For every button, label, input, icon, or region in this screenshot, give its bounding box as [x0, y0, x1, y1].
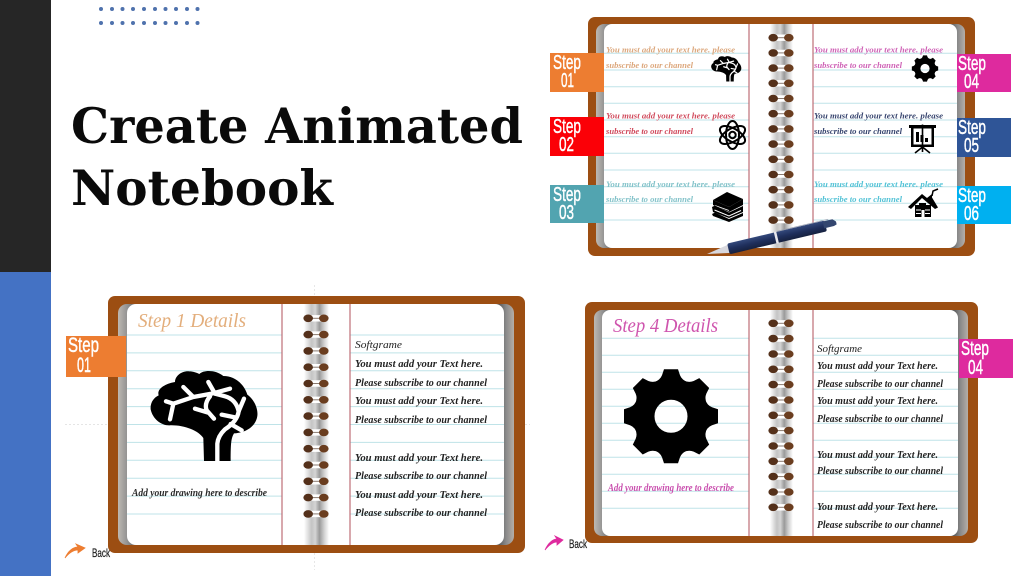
page edge	[596, 24, 965, 248]
notebook cover	[588, 17, 975, 256]
step tag 03	[550, 184, 604, 224]
text block: step 2	[605, 110, 735, 136]
step tag 01: 01	[561, 70, 574, 92]
notebook cover	[585, 302, 978, 543]
title	[71, 97, 523, 217]
title: Create Animated	[71, 97, 523, 155]
text block: notes: Please subscribe to our channel	[817, 414, 943, 425]
back link: Back	[569, 537, 588, 551]
step tag 05: Step	[958, 117, 986, 139]
blue sidebar band	[0, 272, 51, 576]
text block: step 1	[605, 44, 735, 70]
text block: step 5	[813, 110, 943, 136]
text block: notes: You must add your Text here.	[355, 359, 483, 370]
step tag 03: Step	[553, 184, 581, 206]
text block: notes: You must add your Text here.	[817, 502, 938, 513]
spiral spine shading	[770, 310, 793, 536]
text block: notes: You must add your Text here.	[355, 396, 483, 407]
dot pattern	[99, 7, 200, 25]
step tag 04	[957, 53, 1011, 93]
panel: overview notebook with six steps	[550, 17, 1011, 260]
text block: notes: Softgrame	[817, 344, 863, 355]
step tag 04: 04	[964, 71, 979, 93]
spiral rings	[303, 314, 329, 518]
icon: stack of books	[712, 192, 743, 222]
icon: brain	[711, 56, 741, 82]
text block: step 5: You must add your text here. please	[814, 110, 943, 120]
text block: notes	[355, 340, 487, 519]
step tag 02: Step	[553, 116, 581, 138]
text block: step 3	[605, 179, 735, 204]
text block: step 6: You must add your text here. please	[814, 179, 943, 189]
caption: drawing prompt: Add your drawing here to describe	[607, 483, 734, 494]
spiral rings	[768, 34, 794, 224]
step tag 01: Step	[68, 334, 99, 357]
step tag 01	[66, 334, 126, 377]
dark sidebar band	[0, 0, 51, 272]
notebook cover	[108, 296, 525, 553]
icon: brain large	[151, 371, 257, 462]
step tag 01: Step	[553, 52, 581, 74]
text block: notes: Please subscribe to our channel	[355, 415, 487, 426]
text block: notes: You must add your Text here.	[817, 361, 938, 372]
heading: step 4 details: Step 4 Details	[613, 315, 718, 337]
icon: house	[908, 189, 938, 217]
text block: notes: Please subscribe to our channel	[355, 471, 487, 482]
back link: Back	[92, 546, 111, 560]
icon: atom	[717, 121, 748, 149]
heading: step 1 details: Step 1 Details	[138, 310, 246, 332]
back link	[545, 536, 588, 551]
icon: pen	[706, 218, 838, 260]
page edge	[594, 310, 968, 536]
step tag 02	[550, 116, 604, 156]
text block: notes: Please subscribe to our channel	[355, 378, 487, 389]
text block: step 1: subscribe to our channel	[605, 60, 694, 70]
step tag 05: 05	[964, 135, 979, 157]
step tag 06	[957, 185, 1011, 225]
text block: step 2: subscribe to our channel	[605, 126, 694, 136]
notebook pages	[127, 304, 504, 545]
spiral spine shading	[770, 24, 793, 248]
panel: step 4 details notebook	[545, 302, 1013, 551]
spiral rings	[768, 320, 794, 511]
text block: step 4	[813, 44, 943, 70]
step tag 01	[550, 52, 604, 92]
icon: gear	[912, 55, 938, 82]
panel: step 1 details notebook	[65, 296, 525, 560]
text block: notes: Softgrame	[355, 340, 402, 351]
text block: notes: You must add your Text here.	[355, 453, 483, 464]
text block: notes: You must add your Text here.	[817, 396, 938, 407]
notebook pages	[604, 24, 957, 248]
text block: step 4: subscribe to our channel	[813, 60, 903, 70]
step tag 04: 04	[968, 357, 983, 379]
text block: notes: You must add your Text here.	[817, 450, 938, 461]
page edge	[118, 304, 514, 545]
text block: step 6	[813, 179, 943, 204]
text block: notes: Please subscribe to our channel	[355, 508, 487, 519]
text block: notes: Please subscribe to our channel	[817, 379, 943, 390]
text block: notes: Please subscribe to our channel	[817, 520, 943, 531]
back link	[65, 544, 111, 560]
text block: step 2: You must add your text here. please	[606, 110, 735, 120]
step tag 04	[959, 338, 1013, 379]
text block: step 4: You must add your text here. please	[814, 44, 943, 54]
text block: step 6: subscribe to our channel	[813, 194, 903, 204]
text block: step 1: You must add your text here. please	[606, 44, 735, 54]
text block: step 3: subscribe to our channel	[605, 194, 694, 204]
text block: notes	[817, 344, 943, 531]
text block: step 3: You must add your text here. please	[606, 179, 735, 189]
step tag 05	[957, 117, 1011, 157]
text block: notes: Please subscribe to our channel	[817, 466, 943, 477]
step tag 06: 06	[964, 203, 979, 225]
icon: presentation board	[909, 124, 936, 153]
notebook pages	[602, 310, 958, 536]
step tag 02: 02	[559, 134, 574, 156]
caption: drawing prompt: Add your drawing here to describe	[131, 488, 268, 499]
text block: step 5: subscribe to our channel	[813, 126, 903, 136]
step tag 06: Step	[958, 185, 986, 207]
step tag 04: Step	[958, 53, 986, 75]
step tag 04: Step	[961, 338, 989, 360]
step tag 01: 01	[77, 354, 91, 377]
spiral spine shading	[304, 304, 329, 545]
icon: gear large	[624, 369, 718, 463]
title: Notebook	[71, 159, 334, 217]
text block: notes: You must add your Text here.	[355, 490, 483, 501]
step tag 03: 03	[559, 202, 574, 224]
